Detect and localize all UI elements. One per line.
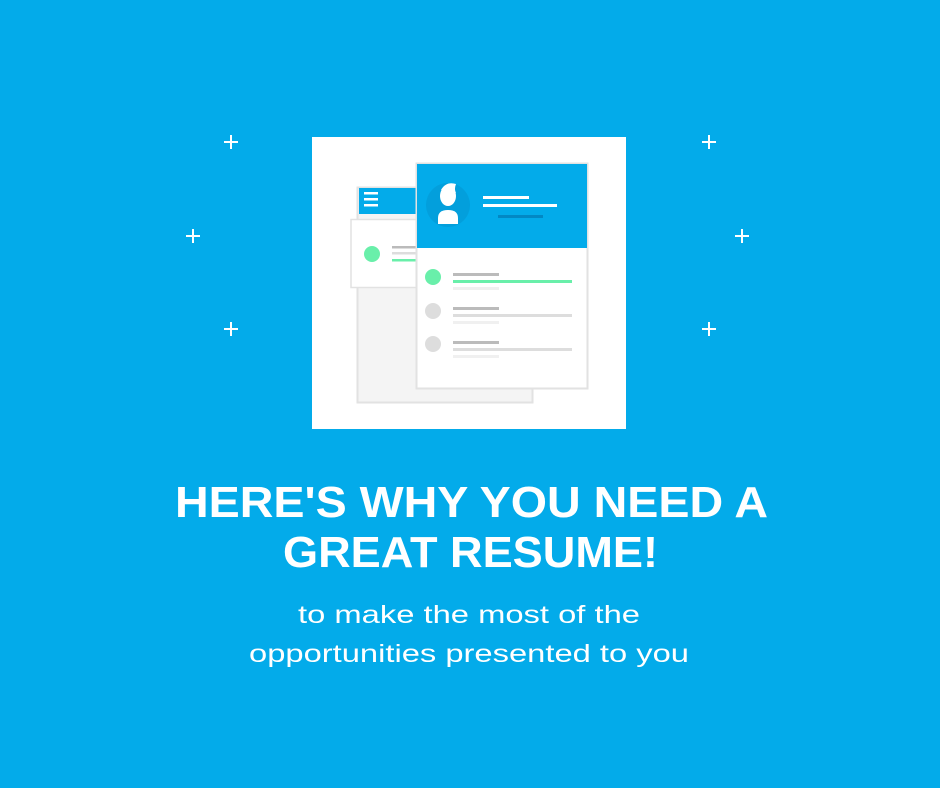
title: HERE'S WHY YOU NEED A (175, 478, 768, 527)
icon: avatar (438, 183, 458, 224)
title: GREAT RESUME! (283, 528, 658, 577)
subtitle: opportunities presented to you (249, 640, 689, 668)
front resume card (416, 164, 588, 388)
title (175, 478, 768, 577)
subtitle: to make the most of the (298, 601, 640, 629)
subtitle (249, 601, 689, 668)
plus decorations (186, 135, 749, 336)
middle card (351, 220, 418, 288)
back sheet (358, 188, 532, 402)
illustration: resume documents (312, 137, 626, 429)
